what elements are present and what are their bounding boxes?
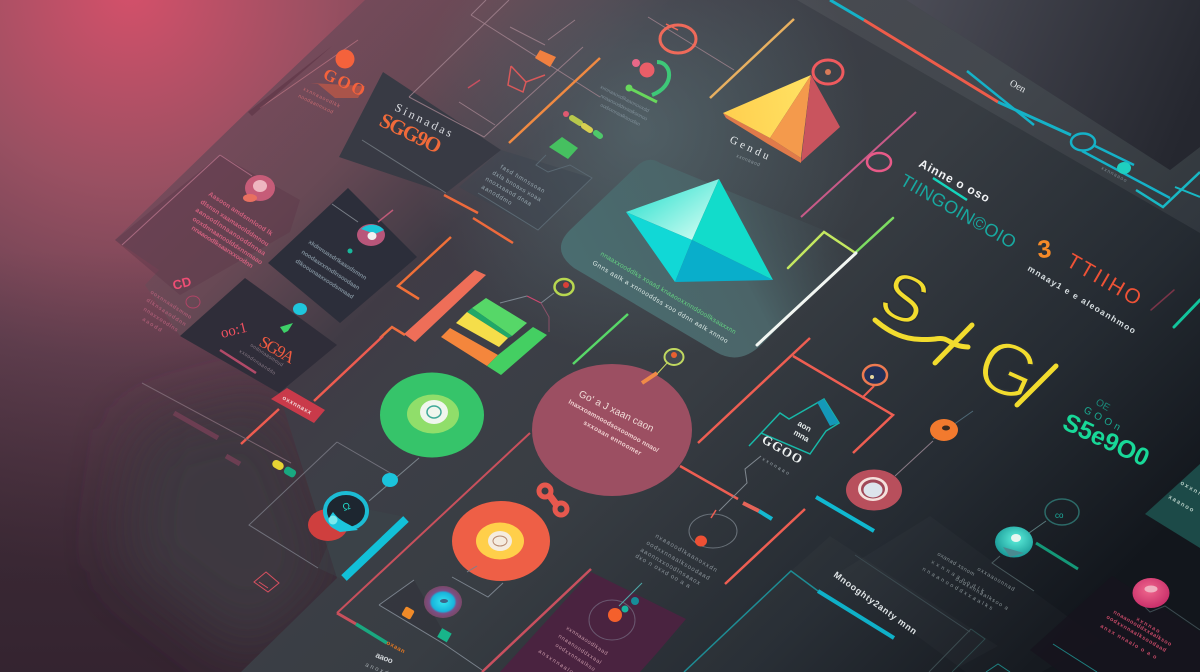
icon: triangle shape sketch [468, 50, 556, 92]
red heading text: oo:1 [219, 320, 249, 342]
panel: dark heading card [339, 72, 501, 193]
red connector from tag [241, 336, 383, 444]
red green orange base line: aaoo [374, 651, 394, 666]
orange node [930, 419, 958, 441]
teal panel [561, 160, 860, 357]
green bars chart [380, 270, 547, 375]
text block [190, 191, 274, 270]
wireframe panel with teal icon [249, 442, 419, 579]
blue node [382, 473, 398, 487]
circle heading: Go' a J xaan caon [577, 389, 655, 435]
teal house icon [749, 399, 839, 477]
panel: pink sphere card [1030, 576, 1200, 672]
text block lower centre [634, 534, 718, 590]
small circuit labels: Oen [1008, 78, 1027, 95]
text block: below arc: nnaanooddxxaalksnnoo [599, 93, 648, 122]
ring connector [642, 349, 684, 383]
maroon circle with text [532, 349, 692, 496]
green heading text: GOOn [1082, 405, 1122, 433]
panel: teal sphere card [835, 499, 1100, 672]
text block: oodxxnnaalksoo a [954, 577, 1010, 612]
icon: red glyph [695, 536, 707, 546]
faint left lines and pills [142, 383, 297, 478]
teal house icon: aon [796, 419, 813, 434]
wireframe top panel [409, 0, 734, 137]
heading: Anne with teal subtitle: Ainne o oso [917, 156, 992, 205]
green L block [487, 327, 547, 375]
heading text: Sinnadas [393, 100, 455, 140]
orange block [441, 328, 498, 366]
top orange icon group [248, 40, 368, 116]
icon: red ring [813, 60, 843, 84]
text block: below arc: oodxxnnaalksoodan [599, 102, 641, 128]
text block: xkdnnuasdrlkaaodsmnn [307, 240, 367, 282]
red line structure lower centre [680, 338, 893, 584]
icon: square outline [254, 572, 279, 592]
teal house icon: mna [792, 428, 811, 444]
icon: pink and teal pin [348, 224, 385, 254]
panel: green right card: xaanoo [1167, 495, 1195, 514]
heading: Anne with teal subtitle: TIINGOIN©OIO [897, 170, 1020, 252]
yellow block [456, 312, 508, 347]
text block: xxnnaaoodlkaad [565, 626, 608, 657]
text block: dlkoounaaxxoodsnnaad [294, 259, 354, 301]
text block: ooxdnnaanoolddxnnmaao [191, 216, 264, 266]
top right corner panel [797, 0, 1200, 233]
right side accent lines [1151, 290, 1200, 327]
salmon bar [404, 270, 486, 342]
red green orange base line: oxaan [385, 640, 406, 655]
connector line to maroon circle [337, 433, 530, 613]
color pills [566, 114, 600, 136]
panel: pink small text: aaodd [141, 317, 163, 334]
panel: green right card [1145, 464, 1200, 548]
orange and navy ring [863, 365, 887, 385]
target circle [846, 470, 902, 510]
red tag [271, 388, 325, 423]
text block [238, 343, 284, 377]
text block: nnaaoodlksaanxxoodnn [190, 225, 254, 270]
gold diagonal line [710, 19, 794, 98]
panel: pink small text: ooxnnaadsmmo [149, 290, 193, 321]
orange diagonal line [509, 58, 600, 143]
pyramid label: Gendu [728, 134, 771, 163]
red ring top [660, 24, 696, 53]
green square [437, 628, 452, 642]
text block lower centre: nxaaoodlkaanoxxdn [654, 534, 718, 574]
text block: aanoodlnnaanooddnnaa [194, 207, 267, 258]
icon: pink pin [243, 175, 275, 202]
text block [480, 165, 545, 208]
blue diagonal bar [344, 519, 406, 578]
text block: nnaanooddxxaalksoo [1112, 610, 1173, 648]
text block: xxnnao [1135, 617, 1161, 635]
text block [297, 86, 341, 116]
panel: dark card with red text [180, 278, 337, 393]
card heading: Mnooghty2anty mnn [832, 570, 919, 636]
split small bar [743, 503, 772, 519]
small circuit labels [1008, 78, 1128, 184]
panel: pink small text: nnaxxoodlns [142, 307, 179, 333]
panel: pink small text: dlknsaaoddnn [145, 298, 187, 328]
green heading text: OE [1094, 397, 1112, 414]
text block: noodaannxxod [297, 93, 334, 116]
panel: pink small text [141, 274, 200, 334]
text block: xxoodnnaanddo [238, 349, 277, 377]
text block: nnaanooddxxaal [557, 634, 602, 666]
circle text: Inaxxoamnoodsoxoomoo nnao/ [567, 399, 660, 454]
pyramid [723, 60, 843, 163]
pyramid label: xxnnaaod [735, 153, 761, 168]
text block: fasd hmnssoan [499, 165, 545, 195]
text block: Aasoon amdsnnlood lk [207, 191, 274, 238]
teal dot [293, 303, 307, 315]
bottom corner lines [929, 629, 1010, 672]
text block [921, 552, 1015, 612]
pink sphere [1132, 578, 1170, 608]
teal node [1117, 162, 1131, 174]
text block: oodxxnnaalksoodaad [1105, 615, 1167, 654]
top teal and red circuit lines [830, 0, 1200, 207]
soft lower left shade [120, 393, 345, 660]
big yellow title: S [870, 255, 940, 341]
text block: dxla bnoaxs xoaa [491, 171, 542, 204]
big yellow title [870, 255, 1056, 419]
text block lower centre: oodxxnnaalksoodaad [645, 541, 710, 582]
green block [472, 298, 527, 336]
small circuit labels: xxnnaaoo [1100, 165, 1128, 184]
teal house icon: xxnnaao [761, 457, 790, 477]
heading: orange three TTIIHO: TTIIHO [1062, 249, 1145, 310]
text block [1099, 610, 1173, 661]
house label: GGOO [760, 432, 805, 467]
teal kite [626, 179, 773, 282]
icon: teal chat: Ω [341, 501, 353, 514]
pink diagonal line with ring [801, 112, 916, 217]
text block: ansx nnaalo o a o [1099, 624, 1158, 661]
wire panel with orb [379, 566, 503, 670]
green diagonal line [573, 314, 628, 364]
circle text: sxxoaan ennoomer [582, 420, 643, 457]
text block: nnaanooddxxaalks [921, 567, 993, 612]
panel: grey text card [459, 137, 592, 230]
text block: oxxaaoonnad [976, 567, 1015, 593]
red green orange base line [337, 613, 406, 672]
orange label: GOO [320, 64, 368, 100]
orange square [401, 606, 415, 620]
icon: teal chat [308, 493, 367, 541]
orb [424, 586, 462, 618]
text block: below arc: xxnnaaoodlkaannooxdd [599, 84, 650, 114]
red donut [452, 501, 550, 581]
wire to green ring [500, 279, 574, 332]
heading: orange three TTIIHO: mnaay1 e e aleoanhmoo [1026, 263, 1137, 336]
red connector from tag: oxxnnaxx [281, 396, 313, 417]
teal panel text: Gnns aalk a xnnooddss xoo ddnn aalk xnnoo [591, 260, 729, 345]
accent bar [220, 350, 256, 373]
text block: aanoddmo [480, 185, 513, 207]
text block: noodaaxxnndlnsoodaan [300, 250, 360, 292]
panel: blue bar heading card [684, 536, 998, 672]
text block: xxnnaaoodlkk [302, 86, 341, 110]
green tag [549, 137, 578, 159]
big yellow title: G [965, 320, 1051, 419]
text block: oodxxnnaalkso [554, 643, 596, 672]
wire to small circle [689, 456, 761, 548]
orange heading text: SGG9O [376, 108, 446, 158]
ring icon: co [1055, 511, 1064, 520]
board centre glow [410, 0, 870, 360]
panel: pink text card [115, 155, 300, 295]
text block lower centre: dxo n oxxd oo a a [634, 554, 691, 590]
green heading text: S5e9O0 [1058, 408, 1154, 472]
blue bar with target [816, 411, 973, 531]
panel: purple card [482, 569, 686, 672]
ring icon [1045, 499, 1079, 525]
panel: dark text card [268, 188, 417, 323]
text block: nnoxxaaod dnaa [484, 177, 533, 208]
panel: dark card with red text: SG9A [256, 332, 299, 368]
green tag [280, 323, 293, 333]
text block: dlsnsn xaamaoolddmnou [199, 199, 270, 248]
text block [294, 240, 367, 301]
orange connector lines [444, 195, 513, 243]
icon: red chain link [539, 485, 567, 515]
orange L line [398, 237, 451, 299]
green donut [380, 372, 484, 458]
heading: orange three TTIIHO [1026, 235, 1145, 336]
text block lower centre: aaonnxxoodlnsaaox [639, 548, 701, 587]
panel: pink small text: CD [171, 274, 193, 293]
text block: oodnnaasmoud [249, 343, 284, 368]
text block [537, 626, 608, 672]
teal panel text: nnaaxxooddlks xoaad knaaooxxnnddoollksaaxxnn [599, 251, 737, 336]
text block: xxnnaaoodlk [930, 560, 985, 595]
teal sphere [995, 526, 1033, 558]
text block: oxanad xsnom [936, 552, 976, 578]
icon: pink dots and green arc [626, 59, 669, 102]
lime and white lines [757, 218, 893, 345]
heading: orange three TTIIHO: 3 [1036, 235, 1052, 264]
text block: below arc [599, 84, 650, 128]
